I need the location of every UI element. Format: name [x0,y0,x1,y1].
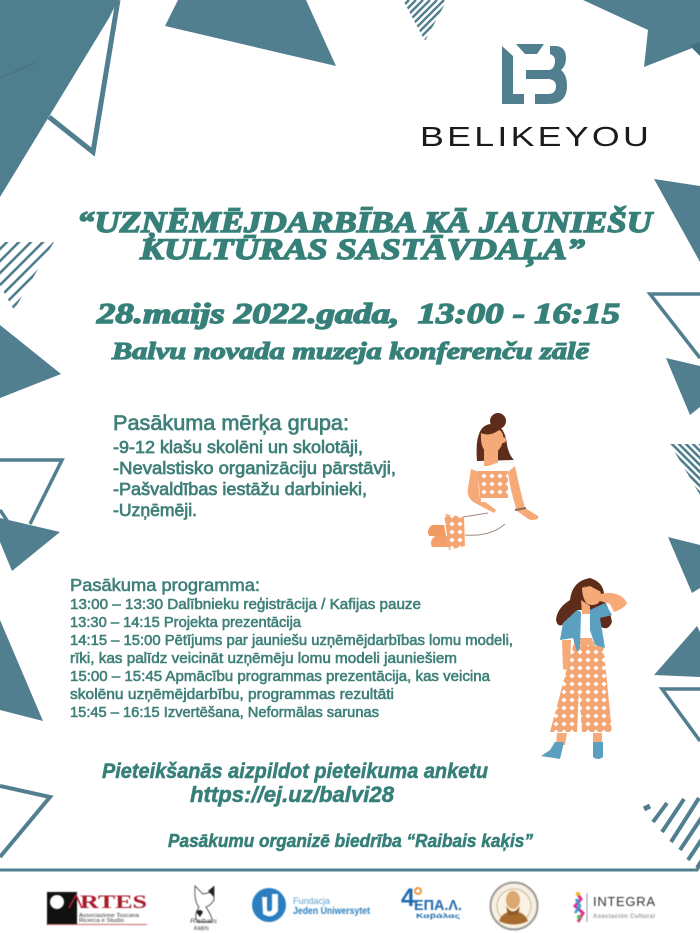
footer divider [0,862,700,870]
left triangle 1 [0,325,61,398]
left triangle 2 [0,518,60,571]
left triangle 3 [0,620,43,721]
programme block [70,575,513,721]
logo: Raibais kakis cat [190,886,218,932]
right side outline triangle 2 [662,689,700,741]
logo wordmark: BELIKEYOU [420,121,649,152]
logo: 4 EPAL Kavalas: ΕΠΑ.Λ. [414,897,462,914]
triangle top right [583,0,700,67]
target group list [113,437,396,520]
triangle top centre [165,0,336,66]
programme list: 15:00 – 15:45 Apmācību programmas prezentācija, kas veicina [70,668,491,685]
left outline triangle 2 [0,786,50,857]
organiser line: Pasākumu organizē biedrība “Raibais kaķis” [168,831,533,851]
right side triangle 1 [654,179,700,262]
logo: INTEGRA [575,892,655,922]
right side triangle 3 [668,537,700,593]
bottom right striped triangle [644,798,700,868]
target group list: -Uzņēmēji. [113,500,197,520]
title [77,206,654,267]
logo: Raibais kakis cat: Raibais [190,918,218,925]
decorative triangles top left [0,0,118,197]
logo: Fundacja Jeden Uniwersytet: Jeden Uniwersytet [293,906,371,917]
target group block [113,412,396,520]
registration call to action: https://ej.uz/balvi28 [190,782,395,807]
logo: ARTES: Associazione Toscana [79,913,140,919]
illustration: standing woman [541,578,627,759]
programme list: skolēnu uzņēmējdarbību, programmas rezultāti [70,686,394,703]
programme list: 13:00 – 13:30 Dalībnieku reģistrācija / Kafijas pauze [70,596,421,613]
right side outline triangle [650,294,700,358]
title: KULTŪRAS SASTĀVDAĻA” [139,233,585,267]
left outline triangle [0,460,62,524]
logo: INTEGRA: Asociación Cultural [593,914,655,920]
right side triangle 4 [654,626,700,677]
date and time: 28.maijs 2022.gada, 13:00 - 16:15 [96,299,620,330]
target group list: -9-12 klašu skolēni un skolotāji, [113,437,363,457]
left striped triangle [0,242,54,309]
illustration: seated woman [428,413,538,550]
logo: ARTES: RTES [80,892,147,913]
striped triangle top [404,0,445,40]
logo: Fundacja Jeden Uniwersytet [252,888,371,922]
target group heading: Pasākuma mērķa grupa: [113,412,349,435]
right striped triangle [670,444,700,495]
title: “UZŅĒMĒJDARBĪBA KĀ JAUNIEŠU [77,206,654,240]
logo: ARTES: Ricerca e Studio [79,918,124,924]
partner logos [47,882,655,932]
programme list: 15:45 – 16:15 Izvertēšana, Neformālas sarunas [70,704,379,721]
logo: BELIKEYOU [420,44,649,152]
logo: INTEGRA: INTEGRA [593,894,655,909]
logo mark [502,44,567,104]
logo: round portrait seal [490,882,538,930]
logo: 4 EPAL Kavalas [401,884,462,920]
registration call to action: Pieteikšanās aizpildot pieteikuma anketu [102,760,488,783]
target group list: -Nevalstisko organizāciju pārstāvji, [113,458,396,478]
logo: ARTES [47,892,147,925]
programme list: 14:15 – 15:00 Pētījums par jauniešu uzņēmējdarbības lomu modeli, [70,632,513,649]
programme list: 13:30 – 14:15 Projekta prezentācija [70,614,302,631]
programme heading: Pasākuma programma: [70,575,260,595]
logo: Raibais kakis cat: kaķis [194,925,210,932]
target group list: -Pašvaldības iestāžu darbinieki, [113,479,367,499]
logo: Fundacja Jeden Uniwersytet: Fundacja [293,896,331,907]
registration call to action [102,760,488,807]
logo: 4 EPAL Kavalas: Καβάλας [416,912,461,920]
programme list: rīki, kas palīdz veicināt uzņēmēju lomu modeli jauniešiem [70,650,457,667]
programme list [70,596,513,721]
venue: Balvu novada muzeja konferenču zālē [111,339,589,365]
right side triangle 2 [666,358,700,415]
logo: 4 EPAL Kavalas: 4 [401,884,415,912]
